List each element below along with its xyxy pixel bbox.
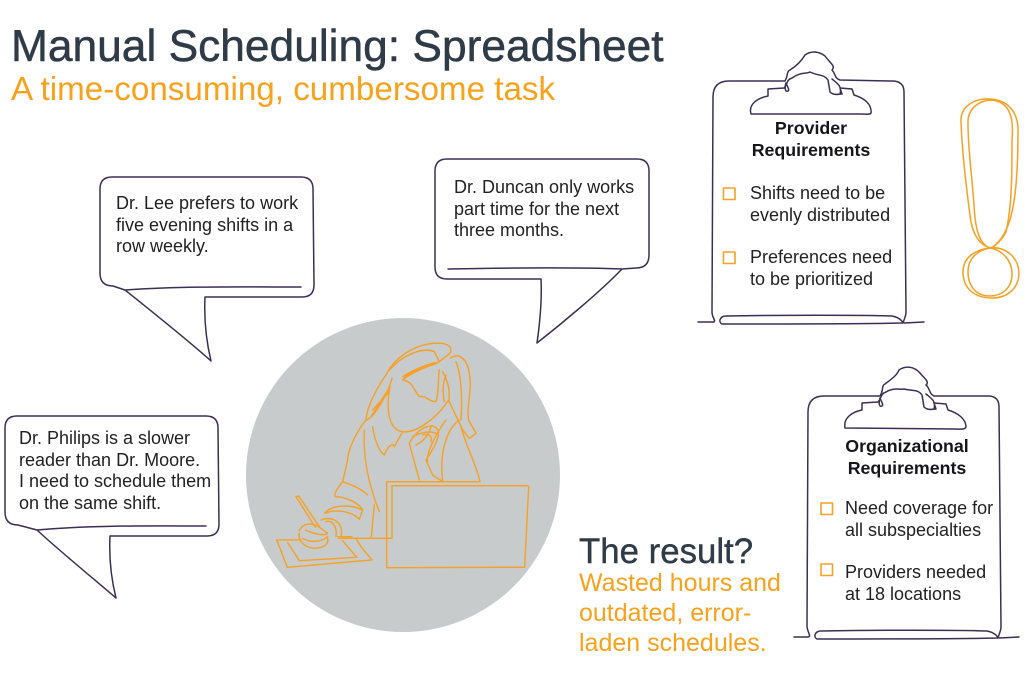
text: Dr. Duncan quote: part time for the next — [454, 198, 619, 218]
heading: provider requirements: Provider — [775, 118, 847, 138]
speech bubble: Dr. Duncan — [435, 159, 649, 343]
text: Dr. Lee quote — [116, 193, 298, 256]
text: Dr. Philips quote: I need to schedule them — [19, 471, 211, 491]
heading: organizational requirements — [845, 436, 969, 478]
text: Dr. Philips quote: on the same shift. — [19, 492, 161, 512]
list text: shifts: Shifts need to be — [750, 183, 885, 203]
clipboard: organizational requirements — [794, 367, 1019, 639]
clipboard: provider requirements — [698, 52, 924, 324]
list text: shifts — [750, 183, 890, 225]
text: Dr. Philips quote: reader than Dr. Moore. — [19, 450, 200, 470]
grey circle — [246, 318, 560, 632]
illustration: person writing at laptop — [277, 343, 529, 568]
result text: Wasted hours and — [579, 569, 781, 597]
checkbox: coverage — [821, 503, 832, 514]
heading: provider requirements — [752, 118, 870, 160]
list text: preferences — [750, 247, 892, 289]
text: Dr. Duncan quote: Dr. Duncan only works — [454, 177, 634, 197]
checkbox: locations — [821, 564, 832, 576]
text: Dr. Philips quote: Dr. Philips is a slower — [19, 428, 190, 448]
heading: organizational requirements: Requirements — [848, 458, 966, 478]
icon: exclamation mark — [961, 99, 1019, 298]
checkbox: preferences — [724, 252, 735, 264]
text: Dr. Philips quote — [19, 428, 211, 512]
list text: preferences: Preferences need — [750, 247, 892, 267]
speech bubble: Dr. Lee — [100, 177, 314, 361]
list text: shifts: evenly distributed — [750, 204, 890, 224]
list text: coverage: Need coverage for — [845, 498, 993, 518]
list text: locations — [845, 562, 986, 604]
result text: laden schedules. — [579, 629, 767, 657]
result text — [579, 569, 781, 657]
heading: organizational requirements: Organizational — [845, 436, 969, 456]
text: Dr. Lee quote: five evening shifts in a — [116, 214, 293, 234]
list text: locations: at 18 locations — [845, 584, 961, 604]
list text: locations: Providers needed — [845, 562, 986, 582]
list text: preferences: to be prioritized — [750, 268, 873, 288]
title: Manual Scheduling: Spreadsheet — [11, 22, 664, 70]
result heading: The result? — [579, 532, 753, 571]
text: Dr. Lee quote: row weekly. — [116, 236, 209, 256]
checkbox: shifts — [724, 188, 735, 200]
heading: provider requirements: Requirements — [752, 140, 870, 160]
list text: coverage: all subspecialties — [845, 520, 981, 540]
subtitle: A time-consuming, cumbersome task — [11, 71, 555, 108]
text: Dr. Duncan quote — [454, 177, 634, 240]
list text: coverage — [845, 498, 993, 540]
text: Dr. Lee quote: Dr. Lee prefers to work — [116, 193, 298, 213]
result text: outdated, error- — [579, 599, 751, 627]
text: Dr. Duncan quote: three months. — [454, 220, 564, 240]
speech bubble: Dr. Philips — [5, 416, 219, 598]
